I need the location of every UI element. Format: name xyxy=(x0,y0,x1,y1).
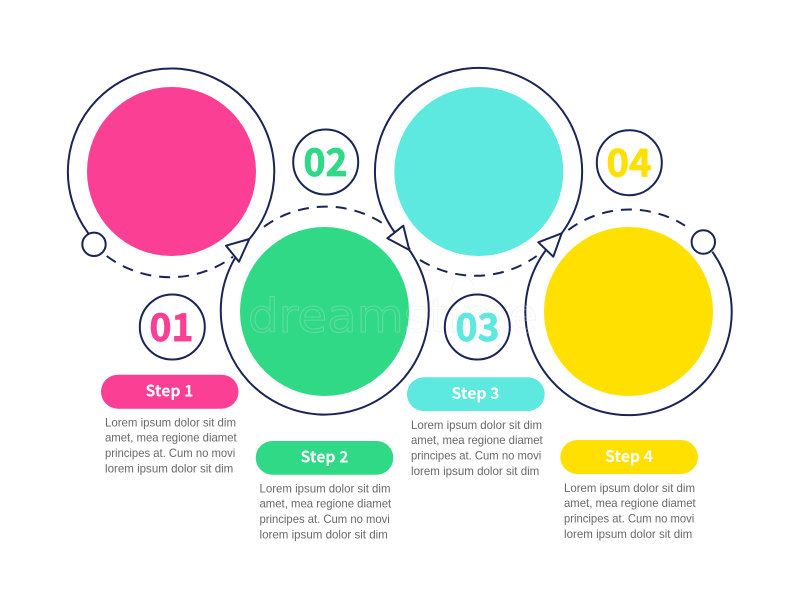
step 4 text block: principes at. Cum no movi xyxy=(564,511,694,525)
step 4 text block: lorem ipsum dolor sit dim xyxy=(564,527,692,541)
step 1 label pill: Step 1 xyxy=(146,378,194,402)
step 4 text block: amet, mea regione diamet xyxy=(564,496,696,510)
step 1 text block: lorem ipsum dolor sit dim xyxy=(105,461,233,475)
number badge 02: 02 xyxy=(304,132,348,187)
step 2 text block: principes at. Cum no movi xyxy=(260,512,390,526)
step 2 label pill: Step 2 xyxy=(300,444,348,468)
arrow: step 2 to step 3 xyxy=(387,226,409,250)
number badge 04 xyxy=(597,130,662,195)
step 2 text block xyxy=(260,481,392,541)
number badge 01 xyxy=(140,294,205,360)
step 3 text block: lorem ipsum dolor sit dim xyxy=(411,464,539,478)
step 3 text block: Lorem ipsum dolor sit dim xyxy=(411,418,542,432)
step 2 label pill xyxy=(256,441,393,475)
step 2 text block: Lorem ipsum dolor sit dim xyxy=(260,481,390,495)
step 3 text block xyxy=(411,418,543,478)
step 3 text block: amet, mea regione diamet xyxy=(411,433,543,447)
step 1 text block: principes at. Cum no movi xyxy=(105,446,235,460)
step 2 text block: amet, mea regione diamet xyxy=(260,497,392,511)
step 3 label pill xyxy=(407,377,545,411)
step 1 label pill xyxy=(101,375,238,409)
step 3 label pill: Step 3 xyxy=(452,380,500,404)
step 1 text block: Lorem ipsum dolor sit dim xyxy=(105,415,236,429)
step 3 text block: principes at. Cum no movi xyxy=(411,448,541,462)
number badge 01: 01 xyxy=(150,297,194,352)
step 2 text block: lorem ipsum dolor sit dim xyxy=(260,527,388,541)
step 4 ring: yellow circle with arc and dashed connector xyxy=(525,210,732,415)
step 4 text block xyxy=(564,481,696,541)
step 4 text block: Lorem ipsum dolor sit dim xyxy=(564,481,695,495)
number badge 04: 04 xyxy=(606,133,652,188)
step 1 text block xyxy=(105,415,237,475)
step 3 ring: cyan circle with arc and dashed connector xyxy=(375,68,582,276)
arrow: step 1 to step 2 xyxy=(226,239,249,262)
watermark: dreamstime xyxy=(248,289,538,343)
number badge 03 xyxy=(445,294,510,360)
step 1 text block: amet, mea regione diamet xyxy=(105,431,237,445)
step 4 label pill xyxy=(560,440,698,474)
number badge 03: 03 xyxy=(456,297,500,352)
step 4 label pill: Step 4 xyxy=(605,443,653,467)
arrow: step 3 to step 4 xyxy=(538,233,562,257)
number badge 02 xyxy=(293,130,358,194)
step 2 ring: green circle with arc and dashed connector xyxy=(221,207,429,415)
step 1 ring: pink circle with arc and dashed connector xyxy=(68,68,274,277)
